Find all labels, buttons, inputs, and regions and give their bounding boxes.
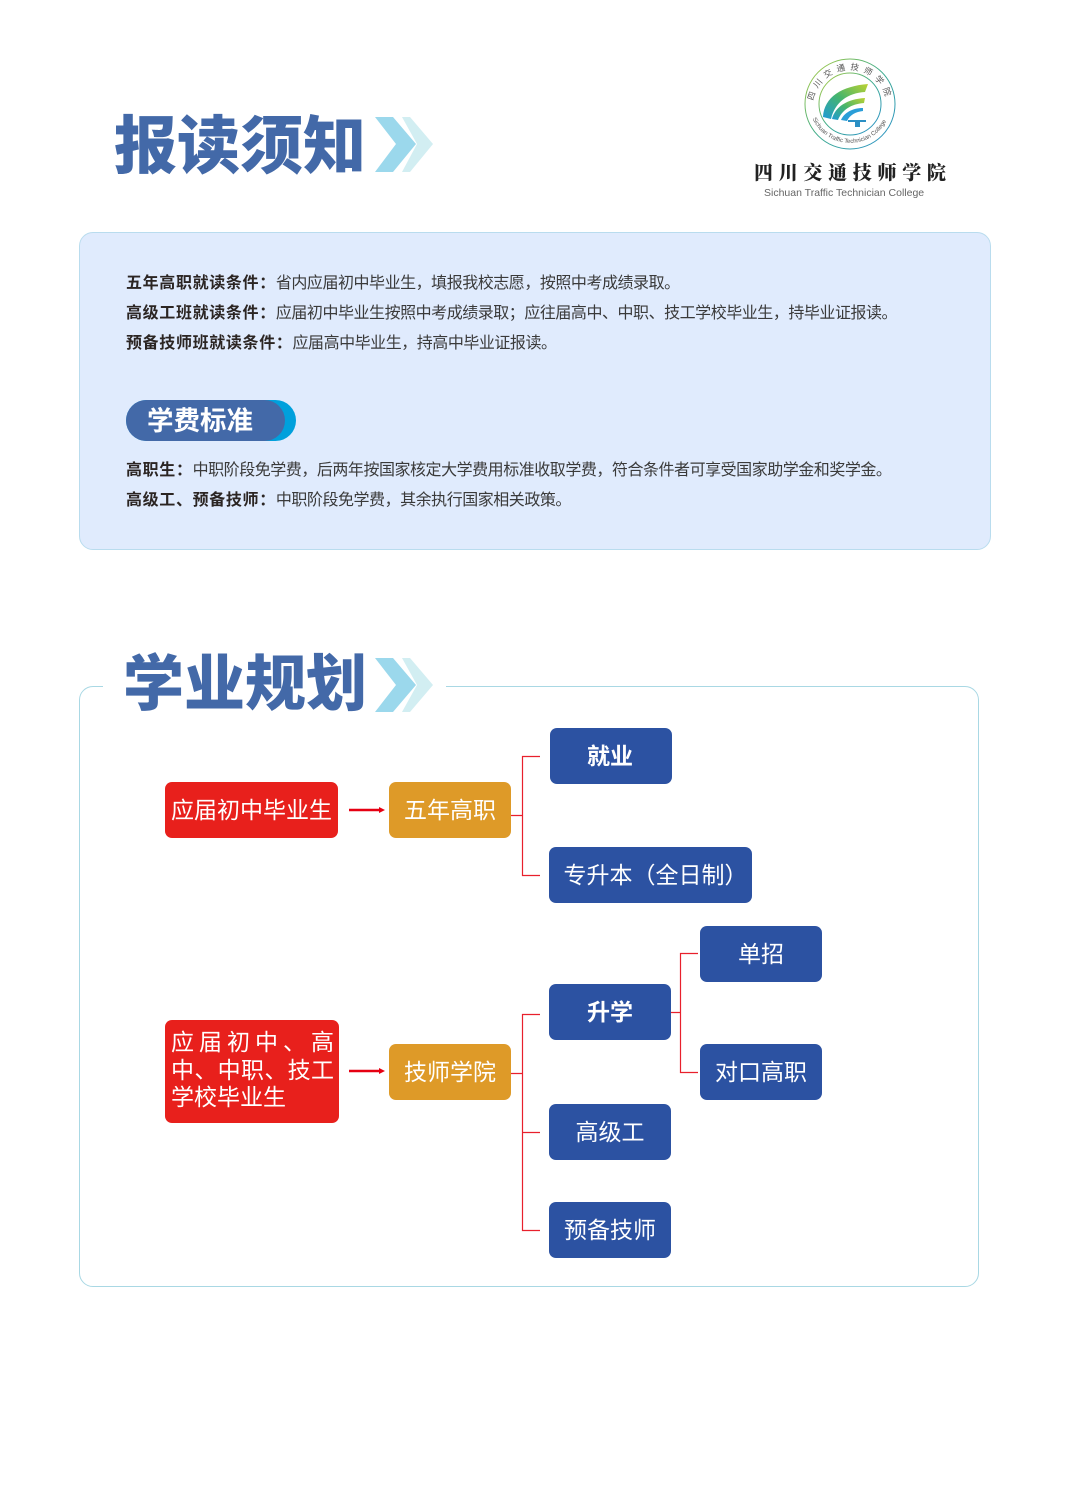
icon: double chevron — [375, 117, 433, 172]
heading: enrollment notes: 报读须知 — [114, 112, 366, 182]
panel: study plan — [79, 686, 979, 1287]
box: preparatory technician: 预备技师 — [564, 1217, 656, 1243]
box: employment — [550, 728, 672, 784]
box: single enrollment: 单招 — [738, 941, 784, 967]
box: graduates group: 中、中职、技工 — [171, 1056, 334, 1082]
badge label: 学费标准 — [147, 406, 253, 436]
college name: 四川交通技师学院 — [754, 158, 952, 185]
logo — [754, 58, 952, 199]
college English name: Sichuan Traffic Technician College — [764, 187, 924, 199]
badge: tuition standard — [126, 400, 296, 441]
box: preparatory technician — [549, 1202, 671, 1258]
text: five-year requirement: 五年高职就读条件：省内应届初中毕业生，填报我校志愿，按照中考成绩录取。 — [126, 275, 680, 292]
box: graduates group — [165, 1020, 339, 1123]
box: junior graduates — [165, 782, 338, 838]
box: single enrollment — [700, 926, 822, 982]
box: further study — [549, 984, 671, 1040]
text: senior worker requirement: 高级工班就读条件：应届初中毕业生按照中考成绩录取；应往届高中、中职、技工学校毕业生，持毕业证报读。 — [126, 305, 897, 322]
heading background — [103, 650, 446, 720]
box: graduates group: 应届初中、高 — [171, 1029, 334, 1055]
box: matched vocational — [700, 1044, 822, 1100]
text: senior worker tuition: 高级工、预备技师：中职阶段免学费，其余执行国家相关政策。 — [126, 492, 571, 509]
box: technician college — [389, 1044, 511, 1100]
panel: requirements — [79, 232, 991, 550]
box: matched vocational: 对口高职 — [715, 1059, 807, 1085]
box: technician college: 技师学院 — [404, 1059, 496, 1085]
icon: college emblem: 四川交通技师学院 — [807, 62, 892, 100]
box: bachelor upgrade: 专升本（全日制） — [564, 862, 748, 888]
box: five-year vocational — [389, 782, 511, 838]
box: five-year vocational: 五年高职 — [404, 797, 496, 823]
box: senior worker — [549, 1104, 671, 1160]
box: junior graduates: 应届初中毕业生 — [171, 797, 332, 823]
text: vocational tuition: 高职生：中职阶段免学费，后两年按国家核定大学费用标准收取学费，符合条件者可享受国家助学金和奖学金。 — [126, 462, 891, 479]
box: further study: 升学 — [587, 999, 633, 1025]
icon: college emblem: Sichuan Traffic Technician College — [813, 118, 886, 143]
box: senior worker: 高级工 — [576, 1119, 644, 1145]
icon: college emblem — [804, 58, 896, 150]
box: graduates group: 学校毕业生 — [171, 1084, 286, 1110]
box: bachelor upgrade — [549, 847, 752, 903]
text: preparatory technician requirement: 预备技师班就读条件：应届高中毕业生，持高中毕业证报读。 — [126, 335, 557, 352]
heading: study plan: 学业规划 — [123, 650, 367, 718]
box: employment: 就业 — [587, 743, 633, 769]
icon: double chevron — [375, 658, 433, 712]
